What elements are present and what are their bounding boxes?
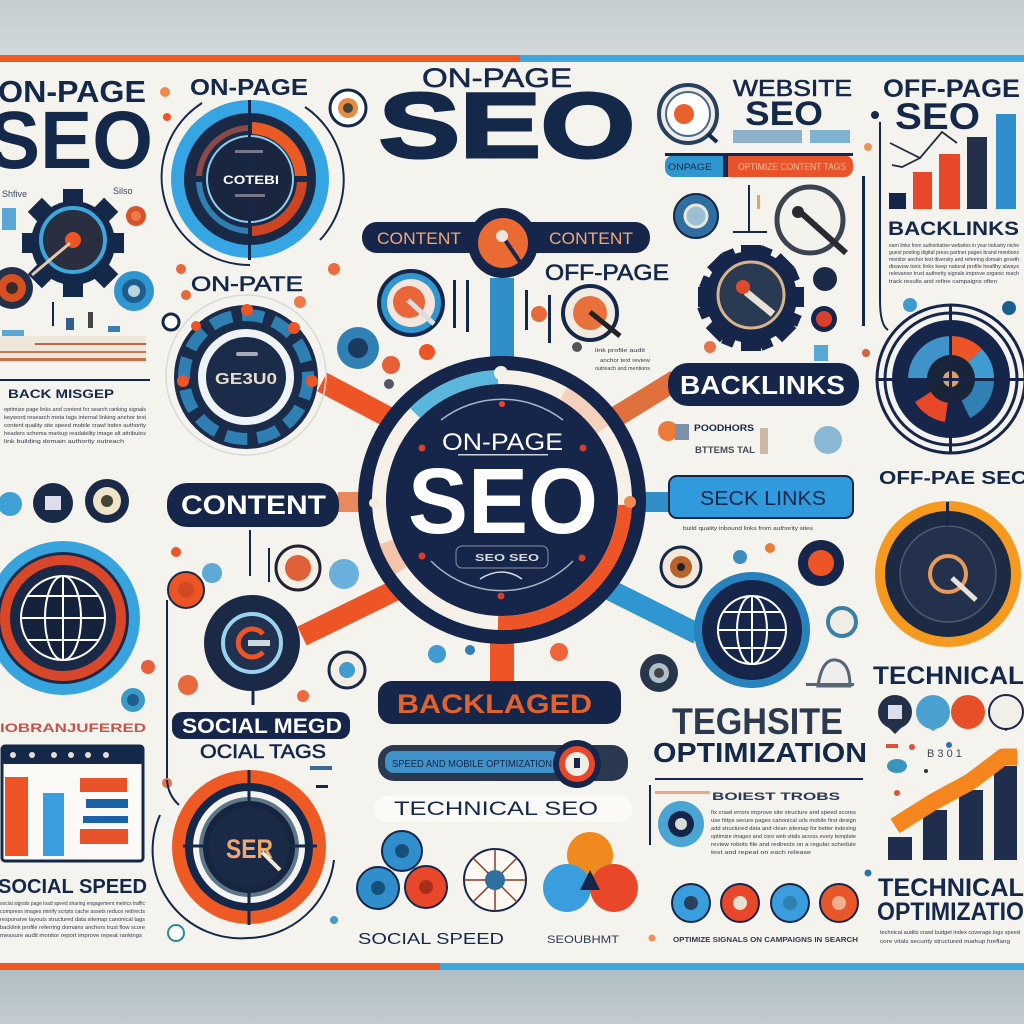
icon: compass wheel xyxy=(464,849,526,911)
icons under magnifier xyxy=(121,643,568,712)
panel: best tips: BOIEST TROBS xyxy=(712,791,840,803)
heading: on-pate: ON-PATE xyxy=(191,273,303,296)
heading: website seo: WEBSITE xyxy=(733,75,852,101)
text block: back links: keyword research meta tags internal linking anchor text xyxy=(4,415,147,421)
panel: gauge dial left xyxy=(166,295,326,455)
panel: globe left xyxy=(0,541,140,695)
panel: on-page donut: COTEBI xyxy=(223,173,279,187)
text block: back links: optimize page links and content for search ranking signals xyxy=(4,407,147,413)
pill: seek links: SECK LINKS xyxy=(700,488,826,510)
heading: tegsite optimization xyxy=(653,701,867,768)
striped text bars xyxy=(0,336,150,381)
small dots around gauge xyxy=(163,263,340,330)
text block: social speed: backlink profile referring domains anchors trust flow score xyxy=(0,925,145,931)
text block: back links: headers schema markup readability image alt attributes xyxy=(4,431,147,437)
pill: blue and orange bar: ONPAGE xyxy=(668,162,712,172)
pill: blue and orange bar xyxy=(665,130,853,177)
heading: technical optimization: TECHNICAL xyxy=(878,874,1024,902)
label: technical seo xyxy=(374,796,632,822)
slider: progress bar xyxy=(378,740,628,788)
text block: back links: link building domain authority outreach xyxy=(4,439,124,445)
icons: central upper targets xyxy=(337,269,620,389)
heading: backlinks: BACKLINKS xyxy=(888,219,1019,240)
panel: best tips: review robots file and redirects on a regular schedule xyxy=(711,842,856,848)
icons: sponsors row xyxy=(658,421,842,455)
pill: seek links xyxy=(669,476,853,518)
label: seoubhmt: SEOUBHMT xyxy=(547,934,619,946)
panel: gear with wrench xyxy=(697,245,804,351)
main title: on-page seo xyxy=(379,63,635,177)
pill: content xyxy=(167,483,339,527)
pill: social media: SOCIAL MEGD xyxy=(182,715,342,738)
icons: right middle targets xyxy=(661,540,844,587)
icon: gear with dial xyxy=(22,189,124,297)
pill: backlaged xyxy=(378,681,621,724)
text block: back links: BACK MISGEP xyxy=(8,387,114,401)
panel: browser chart window xyxy=(2,746,143,861)
icons right of gear xyxy=(704,111,1016,361)
pill: backlinks: BACKLINKS xyxy=(680,370,845,400)
icon: venn circles xyxy=(543,832,638,912)
heading: tegsite optimization: OPTIMIZATION xyxy=(653,737,867,768)
label: red small heading: IOBRANJUFERED xyxy=(0,721,146,735)
panel: right growth chart xyxy=(886,742,1017,860)
panel: right orange gauge xyxy=(875,501,1021,647)
label: technical seo: TECHNICAL SEO xyxy=(394,799,598,820)
panel: magnifier disc xyxy=(167,595,300,780)
small icons row left xyxy=(0,479,204,608)
panel: on-page donut xyxy=(162,100,344,265)
pill: blue and orange bar: OPTIMIZE CONTENT TAGS xyxy=(738,162,846,173)
text block: social speed xyxy=(0,901,146,939)
text block: backlinks: disavow toxic links keep natural profile healthy always xyxy=(889,264,1020,270)
text block: back links xyxy=(4,387,147,445)
caption: bottom row: OPTIMIZE SIGNALS ON CAMPAIGNS IN SEARCH xyxy=(673,937,858,944)
panel: seo orange dial xyxy=(153,770,334,938)
icon: blue ring and magnifier xyxy=(674,185,846,253)
heading: off-page seo: OFF-PAGE xyxy=(883,75,1020,103)
heading: social speed: SOCIAL SPEED xyxy=(0,876,147,898)
panel: best tips: test and repeat on each release xyxy=(711,850,811,856)
heading: tegsite optimization: TEGHSITE xyxy=(672,701,843,742)
connector spokes xyxy=(302,278,698,682)
heading: technical optimization xyxy=(864,870,1024,926)
icon: venn network xyxy=(357,831,447,909)
text block: social speed: social signals page load speed sharing engagement metrics traffic xyxy=(0,901,145,907)
text block: backlinks: track results and refine campaigns often xyxy=(889,279,997,285)
panel: right radar dial xyxy=(877,305,1024,453)
pill: backlinks xyxy=(668,363,859,406)
small text block above backlinks: outreach and mentions xyxy=(595,366,651,372)
pill: content: CONTENT xyxy=(181,490,327,520)
small decorative icons upper left xyxy=(2,87,171,341)
icon: orange dial target top xyxy=(330,85,717,143)
text block: social speed: measure audit monitor report improve repeat rankings xyxy=(0,933,143,939)
heading: off-pae seo: OFF-PAE SEC xyxy=(879,468,1024,488)
heading: website seo xyxy=(733,75,852,133)
icons: bottom row circles xyxy=(648,884,858,942)
title: top left on-page seo: ON-PAGE xyxy=(0,74,146,109)
panel: central seo circle: SEO SEO xyxy=(475,553,539,564)
panel: central seo circle xyxy=(358,356,646,644)
panel: right growth chart: B 3 0 1 xyxy=(927,748,962,760)
small text block above backlinks: anchor text review xyxy=(600,358,650,364)
text block: social speed: responsive layouts structured data sitemap canonical tags xyxy=(0,917,146,923)
text block: technical optimization: technical audits crawl budget index coverage logs speed xyxy=(880,930,1020,936)
heading: off-page seo xyxy=(883,75,1020,137)
heading: technical: TECHNICAL xyxy=(873,662,1024,690)
small accents near orange dial xyxy=(162,766,338,941)
panel: best tips: optimize images and core web vitals across every template xyxy=(711,834,856,840)
text block: technical optimization: core vitals security structured markup hreflang xyxy=(880,939,1010,945)
main title: on-page seo: ON-PAGE xyxy=(422,63,572,93)
heading: social tags: OCIAL TAGS xyxy=(200,742,326,763)
small text block above backlinks xyxy=(595,348,651,372)
icons around globe xyxy=(640,608,856,692)
small text block above backlinks: link profile audit xyxy=(595,348,646,354)
text block: backlinks: relevance trust authority signals improve organic reach xyxy=(889,271,1019,277)
panel: best tips: use https secure pages canonical urls mobile first design xyxy=(711,818,856,824)
text block: backlinks xyxy=(889,243,1020,285)
text block: back links: content quality site speed mobile crawl index authority xyxy=(4,423,147,429)
icon: swirl left xyxy=(0,267,33,309)
panel: central seo circle: SEO xyxy=(408,449,598,553)
panel: seo orange dial: SER xyxy=(226,834,273,864)
panel: central seo circle: ON-PAGE xyxy=(442,429,563,456)
icon: blue ring left xyxy=(114,271,154,311)
icons: sponsors row: POODHORS xyxy=(694,423,754,433)
small icons mid left xyxy=(141,530,359,674)
panel: gauge dial left: GE3U0 xyxy=(215,371,277,388)
main title: on-page seo: SEO xyxy=(379,75,635,177)
icon: globe right xyxy=(694,572,810,688)
icons: technical pins xyxy=(878,695,1023,734)
label: social speed bottom: SOCIAL SPEED xyxy=(358,931,504,948)
text block: social speed: compress images minify scripts cache assets reduce redirects xyxy=(0,909,146,915)
text block: backlinks: monitor anchor text diversity and referring domain growth xyxy=(889,257,1019,263)
slider: progress bar: SPEED AND MOBILE OPTIMIZATION xyxy=(392,759,552,770)
panel: best tips xyxy=(649,778,863,856)
pill: backlaged: BACKLAGED xyxy=(397,689,592,719)
panel: best tips: add structured data and clean sitemap for better indexing xyxy=(711,826,856,832)
pill: content with dial: CONTENT xyxy=(549,229,633,248)
text block: backlinks: earn links from authoritative websites in your industry niche xyxy=(889,243,1019,249)
label: off-page: OFF-PAGE xyxy=(545,260,669,285)
pill: content with dial xyxy=(362,208,650,278)
panel: best tips: fix crawl errors improve site structure and speed scores xyxy=(711,810,857,816)
small decorative icons upper left: Silso xyxy=(113,186,133,196)
pill: content with dial: CONTENT xyxy=(377,229,461,248)
heading: on-page small: ON-PAGE xyxy=(190,74,308,100)
text block: backlinks: guest posting digital press partner pages brand mentions xyxy=(889,250,1020,256)
text block: technical optimization xyxy=(880,930,1020,945)
small decorative icons upper left: Shfive xyxy=(2,189,27,199)
small text under seek links: build quality inbound links from authority sites xyxy=(683,526,814,532)
icons: sponsors row: BTTEMS TAL xyxy=(695,445,756,455)
heading: website seo: SEO xyxy=(745,95,823,133)
panel: right top bar chart xyxy=(889,114,1016,209)
heading: off-page seo: SEO xyxy=(895,96,980,137)
